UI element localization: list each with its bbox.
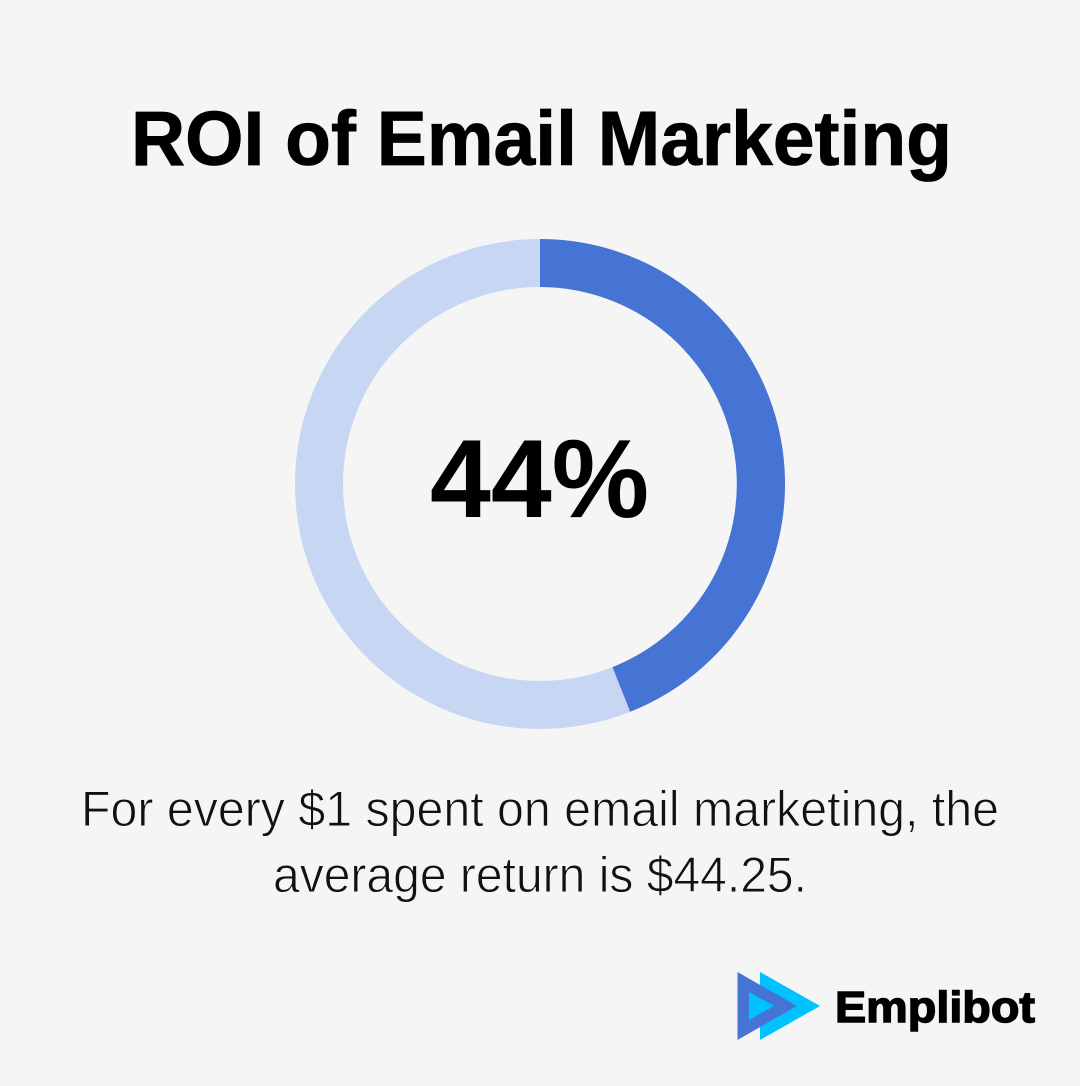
description text: average return is $44.25. bbox=[273, 847, 807, 903]
donut chart bbox=[319, 239, 785, 712]
description text: For every $1 spent on email marketing, the bbox=[81, 781, 999, 837]
brand name: Emplibot bbox=[835, 983, 1035, 1032]
icon: play triangles bbox=[738, 972, 820, 1040]
center value: 44% bbox=[430, 417, 649, 541]
title: ROI of Email Marketing bbox=[131, 96, 952, 182]
brand logo bbox=[738, 972, 1035, 1040]
donut track bbox=[319, 263, 761, 705]
description text bbox=[81, 781, 999, 903]
donut value segment: 44% bbox=[540, 239, 785, 712]
